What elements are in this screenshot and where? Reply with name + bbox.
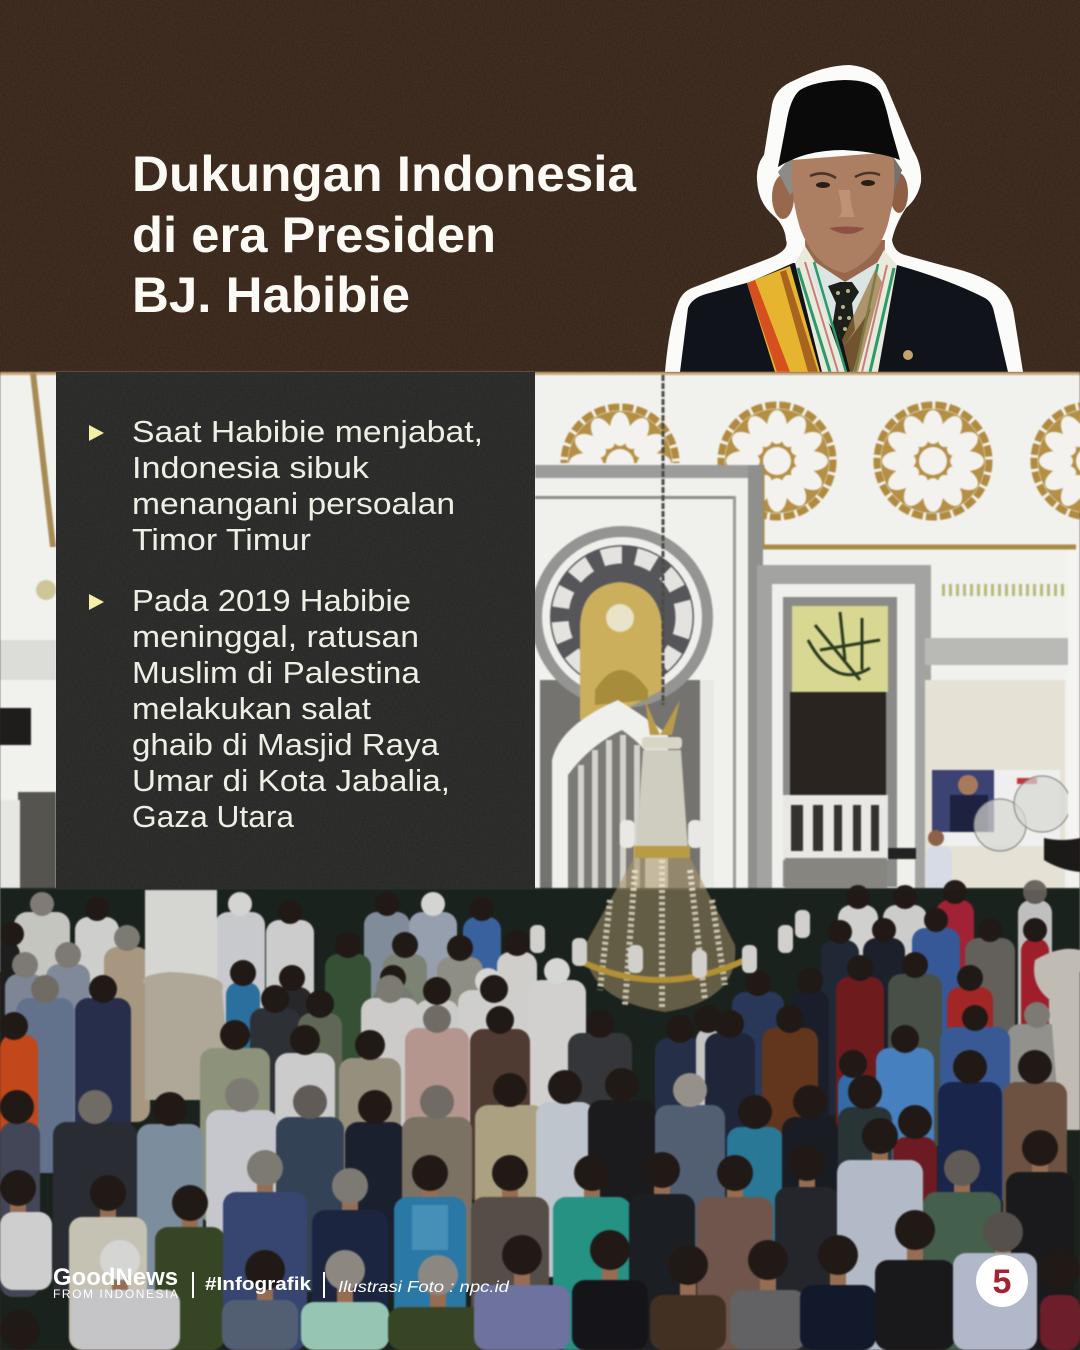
bullet 1 icon [89, 425, 104, 441]
bullet 2 text: Gaza Utara [132, 799, 295, 834]
pillar left [143, 890, 232, 1100]
grey hair [778, 155, 800, 195]
pillar right [1034, 949, 1080, 1130]
footer divider 2 [323, 1272, 325, 1298]
bullet 1 text: Saat Habibie menjabat, [132, 414, 483, 449]
white sticker outline [665, 65, 1023, 372]
title: di era Presiden [132, 207, 496, 263]
bullet 2 text: ghaib di Masjid Raya [132, 727, 440, 762]
bullet 2 text: Muslim di Palestina [132, 655, 421, 690]
ears [772, 175, 794, 219]
bullet 1 text: Indonesia sibuk [132, 450, 370, 485]
bullet 2 text: Pada 2019 Habibie [132, 583, 411, 618]
page number badge [976, 1255, 1028, 1307]
cameraman [926, 846, 952, 902]
portrait: BJ Habibie [665, 65, 1023, 372]
fifth row [0, 1050, 1067, 1312]
pin [903, 350, 913, 360]
ribbon stripes [795, 246, 846, 372]
footer logo: GoodNews [53, 1264, 178, 1291]
bullet 2 text: melakukan salat [132, 691, 371, 726]
photo: mosque interior [0, 372, 1080, 972]
eyes [816, 180, 875, 188]
suit [680, 263, 1008, 372]
chain [662, 375, 664, 705]
bullet 1 text [132, 414, 483, 557]
bullet 1 text: Timor Timur [132, 522, 311, 557]
tie [828, 282, 859, 345]
wall [0, 372, 1080, 972]
fans [974, 799, 1026, 851]
footer hashtag: #Infografik [205, 1274, 312, 1294]
mihrab frame [531, 465, 763, 896]
black peci [778, 80, 900, 167]
chandelier [530, 700, 810, 1012]
poster [932, 770, 1060, 846]
bullet 1 text: menangani persoalan [132, 486, 455, 521]
column right [1068, 550, 1080, 840]
fourth row [200, 1020, 401, 1233]
mouth [829, 226, 865, 234]
sash yellow [747, 266, 820, 372]
footer divider 1 [192, 1272, 194, 1298]
bullet 2 text: meninggal, ratusan [132, 619, 419, 654]
crowd shade [0, 890, 1080, 1350]
calligraphy panel [808, 612, 880, 680]
text panel [56, 372, 535, 889]
footer logo: FROM INDONESIA [53, 1287, 178, 1301]
neck and collar [805, 240, 885, 300]
photo credit: Ilustrasi Foto : npc.id [338, 1279, 510, 1296]
bullet 2 text [132, 583, 450, 834]
bullet 2 text: Umar di Kota Jabalia, [132, 763, 450, 798]
page number badge: 5 [993, 1263, 1011, 1301]
header background [0, 0, 1080, 373]
right wall details [888, 550, 1080, 902]
left wall details [0, 373, 56, 900]
balcony [783, 795, 888, 860]
rosettes [721, 405, 1080, 517]
title: Dukungan Indonesia [132, 146, 637, 202]
third row [0, 975, 934, 1248]
pulpit [757, 565, 931, 895]
second row [5, 925, 1067, 1202]
front row [0, 1210, 1080, 1350]
photo: crowd of worshippers [0, 700, 1080, 1350]
face [792, 152, 894, 273]
jersey number [412, 1205, 448, 1250]
title [132, 146, 637, 323]
title: BJ. Habibie [132, 267, 410, 323]
sixth row [0, 1118, 1074, 1350]
far row [0, 880, 1052, 1117]
bullet 2 icon [89, 594, 104, 610]
half rosette [560, 402, 680, 464]
gold frame line [762, 465, 1076, 547]
